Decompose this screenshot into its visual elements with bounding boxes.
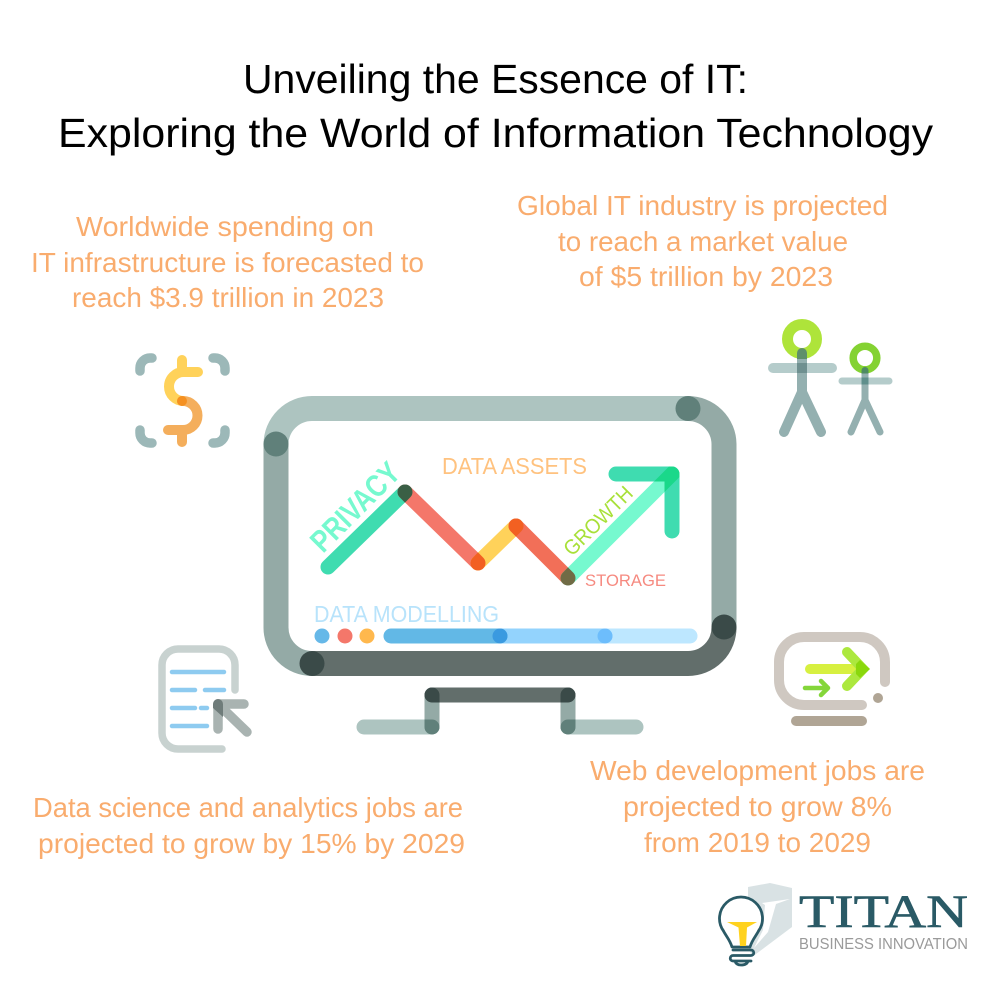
monitor frame xyxy=(264,396,736,676)
icon: dollar sign in brackets xyxy=(140,358,225,443)
text block: global IT market value: Global IT industry is projected xyxy=(517,190,888,221)
text block: IT infrastructure spending: IT infrastructure is forecasted to xyxy=(31,247,424,278)
label: storage: STORAGE xyxy=(585,571,666,590)
icon: two people xyxy=(773,324,889,432)
label: data modelling: DATA MODELLING xyxy=(314,601,499,627)
icon: web development screen with arrows xyxy=(779,637,885,721)
logo: Titan Business Innovation xyxy=(720,883,968,965)
progress bar with dots xyxy=(314,628,690,644)
title xyxy=(58,56,934,156)
text block: global IT market value: of $5 trillion by 2023 xyxy=(579,261,833,292)
text block: web development jobs xyxy=(590,755,925,858)
text block: IT infrastructure spending: reach $3.9 trillion in 2023 xyxy=(72,282,384,313)
label: data assets: DATA ASSETS xyxy=(442,453,587,479)
label: growth: GROWTH xyxy=(559,482,638,561)
logo shield T cutout xyxy=(754,899,790,948)
text block: web development jobs: Web development jobs are xyxy=(590,755,925,786)
icon: document with cursor xyxy=(162,649,247,749)
logo bulb xyxy=(720,897,762,965)
logo shield xyxy=(748,883,792,957)
line chart with arrow xyxy=(328,466,680,586)
text block: IT infrastructure spending xyxy=(31,211,424,313)
text block: global IT market value: to reach a market value xyxy=(558,226,848,257)
logo filament xyxy=(727,922,757,946)
monitor stand xyxy=(364,688,636,734)
text block: web development jobs: projected to grow 8% xyxy=(623,791,892,822)
logo tagline: BUSINESS INNOVATION xyxy=(799,936,968,953)
label: privacy: PRIVACY xyxy=(303,455,407,559)
text block: global IT market value xyxy=(517,190,888,292)
text block: web development jobs: from 2019 to 2029 xyxy=(644,827,871,858)
monitor xyxy=(264,396,736,734)
monitor screen xyxy=(288,421,712,651)
logo wordmark: TITAN xyxy=(799,886,968,938)
title: Exploring the World of Information Technology xyxy=(58,110,934,156)
text block: data science jobs: Data science and analytics jobs are xyxy=(33,792,463,823)
title: Unveiling the Essence of IT: xyxy=(243,56,748,102)
text block: data science jobs xyxy=(33,792,465,859)
text block: data science jobs: projected to grow by 15% by 2029 xyxy=(38,828,465,859)
text block: IT infrastructure spending: Worldwide spending on xyxy=(76,211,374,242)
